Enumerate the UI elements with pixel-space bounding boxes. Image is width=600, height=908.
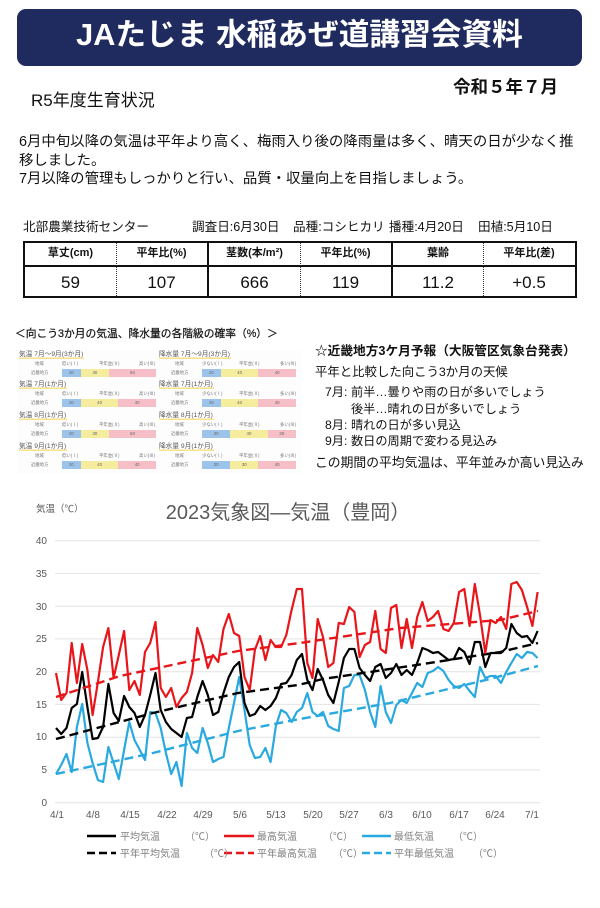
growth data table: 107: [147, 273, 176, 292]
x axis tick labels: 6/24: [485, 810, 505, 821]
growth data table: 666: [240, 273, 269, 292]
forecast September: :: [344, 434, 347, 448]
panel: probability forecasts: 40: [275, 400, 280, 405]
survey info line: [23, 220, 553, 234]
legend: 平年最低気温: [394, 847, 454, 860]
legend: （℃）: [185, 831, 215, 843]
x axis tick labels: 6/10: [412, 810, 432, 821]
y axis tick labels: 5: [41, 765, 47, 776]
forecast heading: ☆近畿地方3ケ月予報（大阪管区気象台発表）: [315, 344, 576, 358]
y axis tick labels: [36, 536, 47, 809]
forecast July: :: [344, 385, 347, 399]
y axis label: 気温（℃）: [36, 503, 84, 515]
panel: probability forecasts: 近畿地方: [171, 431, 189, 436]
panel: probability forecasts: 近畿地方: [31, 431, 49, 436]
panel: probability forecasts: 40: [135, 400, 140, 405]
legend: 平均気温: [120, 830, 160, 843]
y axis tick labels: 30: [36, 602, 47, 613]
x axis tick labels: 4/29: [193, 810, 213, 821]
x axis tick labels: 7/1: [525, 810, 539, 821]
legend: 平年最高気温: [257, 847, 317, 860]
panel: probability forecasts: 平年並(Ⅱ): [99, 422, 120, 427]
title banner: [17, 9, 582, 66]
panel: probability forecasts: 高い(Ⅲ): [139, 391, 155, 396]
y axis tick labels: 15: [36, 700, 47, 711]
title: JAたじま 水稲あぜ道講習会資料: [76, 17, 523, 52]
forecast August: 8月: [325, 418, 344, 432]
forecast July: [325, 385, 546, 416]
forecast July: 7月: [325, 385, 344, 399]
x axis tick labels: 6/3: [379, 810, 393, 821]
panel: probability forecasts: 40: [97, 462, 102, 467]
growth data table: 平年比(差): [503, 247, 555, 259]
forecast September: 数日の周期で変わる見込み: [351, 434, 497, 448]
panel: probability forecasts: 低い(Ⅰ): [62, 422, 78, 427]
forecast July: 前半…曇りや雨の日が多いでしょう: [351, 385, 546, 399]
line: average high (normal): [56, 611, 538, 697]
panel: probability forecasts: 近畿地方: [171, 370, 189, 375]
x axis tick labels: 4/1: [50, 810, 64, 821]
panel: probability forecasts: 地域: [175, 361, 184, 366]
panel: probability forecasts: 地域: [35, 422, 44, 427]
growth data table: 草丈(cm): [48, 247, 93, 259]
panel: probability forecasts: 低い(Ⅰ): [62, 453, 78, 458]
legend: 平年平均気温: [120, 847, 180, 860]
panel: probability forecasts: 平年並(Ⅱ): [239, 361, 260, 366]
panel: probability forecasts: 20: [69, 400, 74, 405]
growth data table: 茎数(本/m²): [226, 247, 283, 259]
panel: probability forecasts: 多い(Ⅲ): [280, 361, 296, 366]
rainfall August: 降水量 8月(1か月): [159, 412, 213, 419]
panel: probability forecasts: 近畿地方: [171, 400, 189, 405]
panel: probability forecasts: 50: [130, 431, 135, 436]
x axis tick labels: 5/20: [303, 810, 323, 821]
x axis tick labels: 5/13: [266, 810, 286, 821]
legend: （℃）: [333, 848, 363, 860]
panel: probability forecasts: 高い(Ⅲ): [139, 361, 155, 366]
line: average mean (normal): [56, 643, 538, 739]
x axis tick labels: 4/15: [120, 810, 140, 821]
panel: probability forecasts: 近畿地方: [31, 370, 49, 375]
panel: probability forecasts: 平年並(Ⅱ): [99, 453, 120, 458]
panel: probability forecasts: 30: [242, 462, 247, 467]
growth data table: 葉齢: [427, 247, 449, 259]
panel: probability forecasts: 地域: [35, 391, 44, 396]
panel: probability forecasts: 平年並(Ⅱ): [99, 361, 120, 366]
growth data table: 平年比(%): [136, 247, 187, 259]
y axis tick labels: 10: [36, 732, 47, 743]
panel: probability forecasts: 40: [97, 400, 102, 405]
probability panel heading: ＜向こう3か月の気温、降水量の各階級の確率（%）＞: [15, 328, 278, 340]
y axis tick labels: 25: [36, 634, 47, 645]
panel: probability forecasts: 地域: [35, 361, 44, 366]
line: daily high: [56, 582, 538, 715]
panel: probability forecasts: 地域: [175, 453, 184, 458]
panel: probability forecasts: 地域: [175, 391, 184, 396]
section heading: growth status: R5年度生育状況: [31, 91, 155, 110]
panel: probability forecasts: 少ない(Ⅰ): [202, 361, 222, 366]
panel: probability forecasts: 20: [69, 370, 74, 375]
panel: probability forecasts: 地域: [35, 453, 44, 458]
legend: （℃）: [204, 848, 234, 860]
temperature chart: [36, 501, 540, 860]
survey info line: 播種:4月20日: [389, 220, 464, 234]
rainfall September: 降水量 9月(1か月): [159, 443, 213, 450]
panel: probability forecasts: 30: [279, 431, 284, 436]
panel: probability forecasts: [17, 350, 301, 474]
panel: probability forecasts: 平年並(Ⅱ): [239, 391, 260, 396]
x axis tick labels: 4/8: [86, 810, 100, 821]
survey info line: 調査日:6月30日: [192, 220, 279, 234]
panel: probability forecasts: 40: [275, 462, 280, 467]
survey info line: 品種:コシヒカリ: [293, 220, 385, 234]
chart title: 2023気象図—気温（豊岡）: [166, 501, 410, 524]
summary text: 移しました。: [19, 152, 105, 168]
growth data table: [23, 241, 577, 298]
legend: （℃）: [453, 831, 483, 843]
panel: probability forecasts: 多い(Ⅲ): [280, 391, 296, 396]
x axis tick labels: 5/6: [233, 810, 247, 821]
growth data table: 11.2: [422, 273, 454, 292]
temperature September: 気温 9月(1か月): [19, 443, 66, 450]
forecast September: 9月: [325, 434, 344, 448]
legend: 最低気温: [394, 830, 434, 843]
growth data table: 119: [332, 273, 359, 292]
line: average low (normal): [56, 666, 538, 774]
panel: probability forecasts: 20: [69, 431, 74, 436]
panel: probability forecasts: 少ない(Ⅰ): [202, 391, 222, 396]
panel: probability forecasts: 40: [237, 400, 242, 405]
summary text: 6月中旬以降の気温は平年より高く、梅雨入り後の降雨量は多く、晴天の日が少なく推: [19, 134, 574, 150]
panel: probability forecasts: 40: [237, 370, 242, 375]
x axis tick labels: 4/22: [157, 810, 177, 821]
panel: probability forecasts: 低い(Ⅰ): [62, 391, 78, 396]
x axis tick labels: 5/27: [339, 810, 359, 821]
summary text: 7月以降の管理もしっかりと行い、品質・収量向上を目指しましょう。: [19, 171, 472, 187]
forecast July: 後半…晴れの日が多いでしょう: [351, 402, 521, 416]
growth data table: 平年比(%): [320, 247, 371, 259]
panel: probability forecasts: 30: [214, 431, 219, 436]
panel: probability forecasts: 高い(Ⅲ): [139, 453, 155, 458]
panel: probability forecasts: 40: [135, 462, 140, 467]
y axis tick labels: 0: [41, 798, 47, 809]
legend: [87, 830, 503, 860]
panel: probability forecasts: 50: [130, 370, 135, 375]
rainfall 3 months: 降水量 7月～9月(3か月): [159, 351, 230, 358]
panel: probability forecasts: 少ない(Ⅰ): [202, 453, 222, 458]
forecast August: 晴れの日が多い見込: [351, 418, 461, 432]
growth data table: 59: [61, 273, 80, 292]
panel: probability forecasts: 30: [92, 370, 97, 375]
panel: probability forecasts: 20: [209, 400, 214, 405]
summary text: [19, 134, 574, 187]
panel: probability forecasts: 40: [247, 431, 251, 436]
panel: probability forecasts: 多い(Ⅲ): [280, 453, 296, 458]
legend: 最高気温: [257, 830, 297, 843]
line: daily low: [56, 652, 538, 786]
panel: probability forecasts: 平年並(Ⅱ): [99, 391, 120, 396]
rainfall July: 降水量 7月(1か月): [159, 381, 213, 388]
date: 令和５年７月: [453, 77, 558, 97]
panel: probability forecasts: 40: [275, 370, 280, 375]
panel: probability forecasts: 近畿地方: [171, 462, 189, 467]
panel: probability forecasts: 30: [92, 431, 97, 436]
panel: probability forecasts: 平年並(Ⅱ): [239, 453, 260, 458]
y axis tick labels: 35: [36, 569, 47, 580]
panel: probability forecasts: 近畿地方: [31, 462, 49, 467]
growth data table: +0.5: [512, 273, 546, 292]
legend: （℃）: [473, 848, 503, 860]
forecast August: :: [344, 418, 347, 432]
panel: probability forecasts: 20: [209, 370, 214, 375]
forecast temperature note: この期間の平均気温は、平年並みか高い見込み: [315, 455, 584, 470]
temperature 3 months: 気温 7月～9月(3か月): [19, 351, 83, 358]
panel: probability forecasts: 地域: [175, 422, 184, 427]
legend: （℃）: [323, 831, 353, 843]
panel: probability forecasts: 30: [214, 462, 219, 467]
panel: probability forecasts: 近畿地方: [31, 400, 49, 405]
panel: probability forecasts: 平年並(Ⅱ): [239, 422, 260, 427]
x axis tick labels: 6/17: [449, 810, 469, 821]
panel: probability forecasts: 少ない(Ⅰ): [202, 422, 222, 427]
forecast subheading: 平年と比較した向こう3か月の天候: [315, 365, 508, 379]
survey info line: 田植:5月10日: [478, 220, 553, 234]
line: daily mean: [56, 624, 538, 739]
survey info line: 北部農業技術センター: [23, 220, 149, 234]
panel: probability forecasts: 高い(Ⅲ): [139, 422, 155, 427]
temperature July: 気温 7月(1か月): [19, 381, 66, 388]
temperature August: 気温 8月(1か月): [19, 412, 66, 419]
y axis tick labels: 40: [36, 536, 47, 547]
panel: probability forecasts: 20: [69, 462, 74, 467]
y axis tick labels: 20: [36, 667, 47, 678]
panel: probability forecasts: 多い(Ⅲ): [280, 422, 296, 427]
panel: probability forecasts: 低い(Ⅰ): [62, 361, 78, 366]
x axis tick labels: [50, 810, 539, 821]
